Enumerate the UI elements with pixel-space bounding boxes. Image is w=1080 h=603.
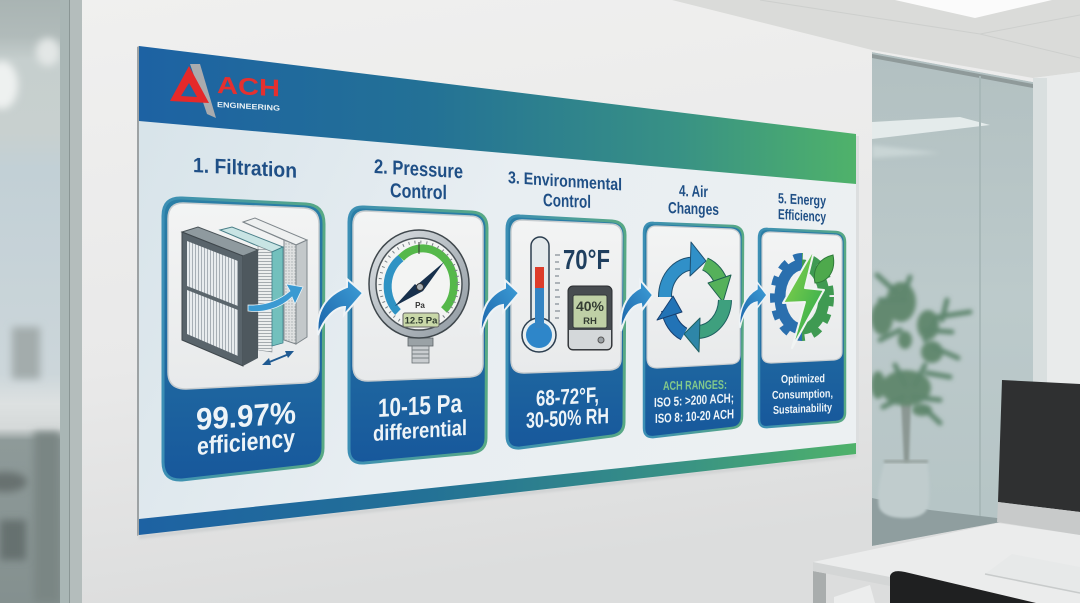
blue arc bbox=[388, 258, 401, 312]
pleated and teal layer bbox=[220, 227, 283, 352]
temperature reading: 70°F bbox=[563, 244, 610, 275]
metric 1 bbox=[196, 395, 296, 461]
arrow D bbox=[657, 296, 684, 334]
footer band bbox=[139, 443, 856, 535]
needle bbox=[395, 262, 444, 306]
arrow 2 bbox=[481, 280, 519, 335]
gauge stem bbox=[408, 338, 433, 363]
desk bbox=[813, 523, 1080, 603]
arrow A bbox=[665, 242, 706, 297]
front filter frame bbox=[182, 227, 258, 366]
metric 5 bbox=[772, 373, 833, 417]
arrow 1 bbox=[318, 279, 363, 335]
glass partition right bbox=[872, 52, 1033, 546]
arrow B bbox=[705, 264, 731, 302]
card 2: pressure control bbox=[349, 207, 487, 463]
icon: thermometer bbox=[522, 237, 560, 352]
leaf bbox=[814, 255, 834, 283]
metric 4: ISO 5: >200 ACH; bbox=[654, 390, 734, 410]
title 4: Changes bbox=[668, 200, 719, 219]
title 5: 5. Energy bbox=[778, 191, 826, 210]
logo wordmark: ACH bbox=[217, 72, 280, 102]
title 5 bbox=[778, 191, 826, 226]
keyboard bbox=[985, 554, 1080, 594]
plant trunk bbox=[901, 400, 911, 462]
card 5: energy efficiency bbox=[759, 229, 845, 427]
foam layer bbox=[243, 218, 307, 344]
metric 4 bbox=[654, 378, 734, 426]
arrow C bbox=[684, 300, 725, 352]
metric 5: Optimized bbox=[781, 373, 825, 386]
title 2 bbox=[374, 156, 463, 204]
plant bbox=[871, 275, 970, 518]
plant foliage bbox=[871, 275, 970, 423]
title 3: 3. Environmental bbox=[508, 168, 622, 194]
chair bbox=[890, 571, 1036, 603]
title 4: 4. Air bbox=[679, 183, 708, 201]
metric 5: Sustainability bbox=[773, 402, 832, 417]
icon: layered air filter bbox=[182, 218, 307, 366]
icon: gear with bolt and leaf bbox=[774, 247, 834, 348]
icon: recirculating arrows bbox=[657, 242, 731, 352]
icon: hygrometer bbox=[568, 286, 612, 350]
card 1: filtration bbox=[163, 198, 324, 480]
gauge unit: Pa bbox=[415, 301, 425, 310]
arrow 3 bbox=[621, 280, 653, 331]
metric 2: differential bbox=[373, 415, 467, 446]
icon: pressure gauge bbox=[369, 230, 469, 363]
title 3: Control bbox=[543, 190, 591, 212]
metric 4: ACH RANGES: bbox=[663, 378, 727, 393]
wall sign panel bbox=[137, 46, 859, 539]
left glass partition bbox=[0, 0, 82, 603]
metric 2 bbox=[373, 388, 467, 446]
ceiling bbox=[672, 0, 1080, 78]
title 1: 1. Filtration bbox=[193, 154, 297, 183]
metric 1: 99.97% bbox=[196, 395, 296, 437]
metric 3 bbox=[526, 382, 609, 433]
icon: hygrometer: 40% bbox=[576, 298, 605, 314]
logo mark bbox=[170, 64, 216, 118]
gauge body bbox=[369, 230, 469, 338]
card 3: environmental control bbox=[507, 216, 625, 448]
title 2: Control bbox=[390, 180, 447, 204]
plant pot bbox=[878, 461, 929, 518]
metric 2: 10-15 Pa bbox=[378, 388, 462, 423]
header band bbox=[139, 46, 856, 184]
lightning bolt bbox=[783, 247, 824, 348]
metric 5: Consumption, bbox=[772, 388, 833, 402]
metric 3: 30-50% RH bbox=[526, 403, 609, 433]
green arc bbox=[401, 248, 454, 310]
ceiling light bbox=[895, 0, 1052, 18]
gauge ticks bbox=[380, 242, 458, 326]
metric 3: 68-72°F, bbox=[536, 382, 599, 411]
metric 1: efficiency bbox=[197, 424, 295, 461]
wall column bbox=[1033, 72, 1080, 530]
airflow arrow bbox=[248, 284, 303, 311]
logo subtitle: ENGINEERING bbox=[217, 100, 280, 113]
gauge display: 12.5 Pa bbox=[405, 316, 438, 326]
monitor bbox=[997, 380, 1080, 535]
title 4 bbox=[668, 183, 719, 219]
arrow 4 bbox=[740, 282, 767, 328]
title 5: Efficiency bbox=[778, 207, 826, 226]
double arrow bbox=[262, 351, 294, 365]
icon: hygrometer: RH bbox=[583, 316, 597, 327]
metric 4: ISO 8: 10-20 ACH bbox=[655, 406, 734, 426]
title 2: 2. Pressure bbox=[374, 156, 463, 183]
logo bbox=[170, 64, 280, 118]
card 4: air changes bbox=[644, 223, 743, 437]
gear bbox=[774, 257, 830, 337]
title 3 bbox=[508, 168, 622, 212]
